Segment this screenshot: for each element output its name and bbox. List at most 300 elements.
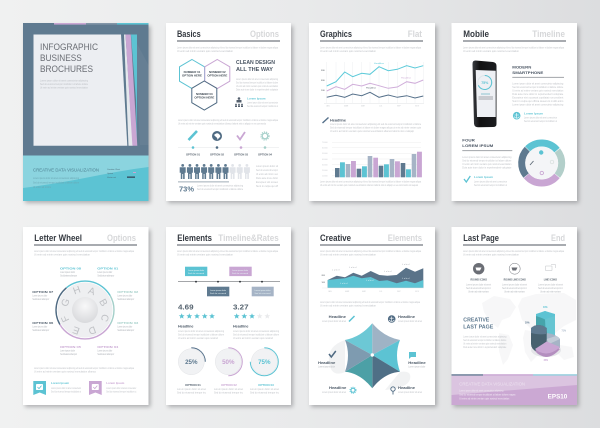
line chart: MAR (344, 104, 349, 108)
line chart: Headline (374, 63, 385, 65)
icon: check (464, 176, 470, 182)
panel: graphics (309, 23, 435, 201)
four lorem ipsum heading: LOREM IPSUM (462, 143, 494, 148)
icon: org chart (235, 97, 243, 107)
clean design heading (236, 60, 275, 73)
item: pin headline (391, 386, 422, 394)
intro text (177, 250, 279, 256)
line chart: Headline (366, 88, 377, 90)
option 04: Sed do eiusmod tempor (97, 353, 115, 356)
intro text: Lorem ipsum dolor sit amet consectetur adipiscing elit sed do eiusmod tempor incididunt ut labore et dolore magna aliqua (463, 250, 565, 253)
bar chart: 40000 (322, 159, 328, 161)
option timeline (178, 146, 279, 156)
area chart: SEP (397, 291, 402, 293)
gauge 50%: 50% (222, 359, 235, 366)
icon column: line icons (538, 264, 564, 294)
gauge text: Lorem ipsum dolor sit amet (177, 388, 206, 391)
smartphone text: Sed do eiusmod tempor incididunt ut labore dolore (512, 86, 564, 89)
rating 3.27: Sed do eiusmod tempor incididunt ut labore dolore (233, 334, 280, 336)
timeline: Sed do eiusmod (210, 293, 226, 295)
icon: anchor (513, 112, 520, 119)
icon column: round icons: Sed do eiusmod tempor inc (466, 287, 492, 290)
footer text: Sed do eiusmod tempor incididunt ut labore dolore magna (459, 394, 516, 396)
icon: pencil (188, 131, 197, 140)
line chart (321, 62, 424, 108)
panel: creative (309, 227, 435, 405)
line chart: JUL (379, 106, 382, 108)
callout: lorem ipsum (247, 96, 278, 108)
rating 3.27: Lorem ipsum dolor sit amet consectetur adipiscing (233, 330, 280, 333)
rating 4.69: Lorem ipsum dolor sit amet consectetur adipiscing (178, 330, 225, 333)
body text (34, 367, 135, 374)
creative last page heading: CREATIVE (463, 318, 490, 324)
3D pie chart: 30% (525, 322, 530, 324)
icon: globe (212, 131, 222, 141)
line chart: JAN (326, 104, 330, 108)
item: anchor headline (388, 315, 422, 323)
item: anchor headline: Lorem ipsum dolor sit amet (398, 320, 422, 323)
cover footer text: Lorem ipsum dolor sit amet consectetur adipiscing (33, 177, 80, 180)
item: pin headline: Headline (398, 386, 415, 390)
intro text: Lorem ipsum dolor sit amet consectetur adipiscing elit sed do eiusmod tempor incididunt ut labore et dolore magna aliqua (320, 250, 422, 253)
modern smartphone heading: SMARTPHONE (512, 70, 544, 75)
cover footer text: Ut enim ad minim (33, 186, 51, 189)
option 07: OPTION 07 (32, 290, 54, 294)
panel: elements timeline and rates (166, 227, 291, 405)
heading: end: End (551, 233, 565, 244)
callout: pink: Lorem Ipsum (106, 381, 125, 385)
icon column: round icons (466, 263, 492, 294)
clean design text: Sed do eiusmod tempor incididunt ut labore dolore (236, 82, 279, 84)
modern smartphone heading (512, 65, 544, 75)
letter wheel: G (60, 297, 73, 308)
rating 3.27: Ut enim ad minim veniam quis nostrud (233, 337, 274, 340)
intro text (177, 46, 279, 53)
letter wheel (55, 280, 115, 340)
icon: pencil (322, 118, 328, 123)
timeline: Sed do eiusmod (232, 273, 248, 275)
timeline: Sed do eiusmod (188, 273, 204, 275)
line chart: Headline (401, 78, 412, 80)
item: pencil headline (322, 315, 354, 323)
option 08 (60, 266, 82, 278)
timeline: Lorem ipsum dolor (210, 290, 226, 292)
icon column: line icons: Ut enim ad minim veniam (540, 290, 561, 294)
gauge 50% (215, 348, 242, 376)
item: gear headline: Lorem ipsum dolor sit amet (322, 391, 346, 394)
cover legend (107, 168, 136, 179)
heading: options: Options (250, 29, 279, 40)
callout: teal: Lorem Ipsum (51, 381, 70, 385)
intro text: Ut enim ad minim veniam quis nostrud exercitation (177, 50, 234, 53)
heading: options: Options (107, 233, 136, 244)
footer text (459, 390, 516, 400)
cover title: BROCHURES (40, 64, 93, 75)
callout: lorem ipsum: Sed do eiusmod tempor incididunt ut (247, 105, 278, 108)
icon column: round line icons: ROUND LINE ICONS (504, 280, 526, 282)
stat text (197, 184, 244, 191)
item: pencil headline: Lorem ipsum dolor sit amet (322, 320, 346, 323)
callout: lorem ipsum: Lorem Ipsum (474, 175, 494, 179)
gauge labels: OPTION 03 (258, 383, 274, 387)
intro text: Ut enim ad minim veniam quis nostrud exercitation (463, 50, 520, 53)
headline text block: Headline (330, 118, 346, 122)
option 03: Sed do eiusmod tempor (117, 329, 135, 332)
cover intro text: Sed do eiusmod tempor incididunt ut labore dolore (40, 83, 89, 86)
four lorem text: Lorem ipsum dolor sit amet consectetur adipiscing (462, 156, 512, 159)
clean design text: Ut enim ad minim veniam quis nostrud exercitation (236, 85, 279, 88)
letter wheel: A (87, 286, 97, 298)
gauge text: Sed do eiusmod tempor inc (177, 392, 207, 394)
intro text: Ut enim ad minim veniam quis nostrud exercitation (463, 254, 520, 256)
cover legend: Option (107, 172, 114, 175)
heading: timeline and rates: Timeline&Rates (218, 233, 279, 244)
smartphone text: Lorem ipsum dolor sit amet consectetur adipiscing (512, 104, 564, 106)
rating 4.69: Sed do eiusmod tempor incididunt ut labore dolore (178, 334, 225, 336)
cover intro text: Lorem ipsum dolor sit amet consectetur adipiscing (40, 80, 89, 82)
item: chat headline (408, 352, 426, 368)
icon: check (237, 132, 245, 140)
area chart: Label (402, 264, 411, 266)
panel: mobile (452, 23, 577, 201)
bar chart: 10000 (322, 176, 328, 178)
letter wheel: E (71, 323, 81, 336)
panel: letter wheel (23, 227, 148, 405)
smartphone text: Duis aute irure dolor in reprehenderit voluptate (512, 93, 564, 96)
stat text: Sed do eiusmod tempor incididunt ut labore dolore (197, 188, 244, 191)
3D pie chart: 33% (543, 307, 548, 309)
option 08: Lorem ipsum dolor (60, 271, 75, 274)
area chart: JAN (328, 290, 332, 293)
creative last page heading (463, 318, 494, 330)
side text: Sunt in culpa qui off (256, 185, 278, 188)
clean design heading: ALL THE WAY (236, 67, 274, 73)
option 07: Lorem ipsum dolor (32, 294, 48, 298)
area chart: 100 (322, 282, 326, 284)
headline text block (330, 118, 422, 133)
panel: basics (166, 23, 291, 201)
creative last page text: Sed do eiusmod tempor incididunt ut labore dolore (463, 339, 507, 342)
area chart: JUL (379, 291, 382, 293)
footer text: Ut enim ad minim veniam quis nostrud exercitation (459, 398, 510, 400)
option 02: Sed do eiusmod tempor (117, 298, 135, 301)
side text: Duis aute irure dolor (256, 177, 278, 180)
heading: flat: Flat (408, 29, 423, 40)
3D pie chart: 71% (562, 330, 566, 332)
area chart: MAR (345, 290, 350, 293)
four lorem ipsum heading: FOUR (462, 138, 475, 143)
icon column: round icons: Lorem ipsum dolor sit amet (466, 284, 491, 286)
rating 4.69: 4.69 (178, 304, 194, 311)
creative last page text: Duis aute irure dolor in reprehenderit voluptate (463, 346, 507, 349)
hexagon diagram: NUMBER 03 (196, 92, 213, 96)
callout: lorem ipsum: Lorem Ipsum (524, 112, 544, 116)
intro text (320, 46, 422, 53)
intro text: Ut enim ad minim veniam quis nostrud exercitation (320, 50, 377, 53)
item: check headline (318, 351, 336, 368)
intro text: Lorem ipsum dolor sit amet consectetur adipiscing elit sed do eiusmod tempor incididunt ut labore et dolore magna aliqua (463, 46, 565, 50)
body text: Ut enim ad minim veniam quis nostrud exercitation (320, 304, 377, 308)
headline text block: Sed do eiusmod tempor incididunt ut labore et dolore magna aliqua ut enim ad minim veniam quis (330, 126, 422, 130)
option 02: OPTION 02 (117, 290, 139, 294)
timeline: Sed do eiusmod (254, 293, 270, 295)
option 07 (32, 290, 54, 301)
intro text (463, 46, 565, 53)
donut chart (522, 143, 562, 183)
heading: creative: Creative (320, 233, 351, 244)
footer text: Lorem ipsum dolor sit amet consectetur adipiscing (459, 390, 504, 392)
gauge text: Lorem ipsum dolor sit amet (214, 388, 243, 391)
area chart: NOV (415, 291, 420, 293)
intro text: Ut enim ad minim veniam quis nostrud exercitation (320, 254, 377, 256)
line chart: NOV (415, 106, 420, 108)
icon column: round line icons (502, 263, 528, 294)
creative last page text: Lorem ipsum dolor sit amet consectetur adipiscing (463, 336, 507, 338)
clean design heading: CLEAN DESIGN (236, 60, 275, 66)
panel: cover brochure (23, 23, 148, 201)
callout: lorem ipsum: Lorem ipsum dolor sit amet consectetur (524, 116, 557, 120)
gauge text (177, 388, 280, 394)
gauge labels: OPTION 02 (221, 383, 237, 387)
intro text: Lorem ipsum dolor sit amet consectetur adipiscing elit sed do eiusmod tempor incididunt ut labore et dolore magna aliqua (177, 250, 279, 253)
creative last page heading: LAST PAGE (463, 324, 494, 330)
option 08: Sed do eiusmod tempor (60, 274, 77, 278)
rating 3.27: 3.27 (233, 304, 249, 311)
headline text block: Ut enim ad minim veniam quis nostrud exercitation ullamco laboris nisi ut aliquip (330, 130, 415, 133)
modern smartphone heading: MODERN (512, 65, 531, 70)
panel: last page (452, 227, 577, 405)
option timeline: OPTION 03 (234, 152, 249, 156)
rating 3.27 (233, 304, 280, 340)
option 07: Sed do eiusmod tempor (32, 298, 50, 301)
item: check headline: Lorem ipsum dolor (318, 366, 335, 368)
option timeline: OPTION 04 (258, 152, 273, 156)
clean design text (236, 78, 279, 92)
body text: Lorem ipsum dolor sit amet consectetur adipiscing elit sed do eiusmod tempor incididunt ut labore et dolore magna aliqua (34, 367, 135, 370)
option 05: Sed do eiusmod tempor (60, 353, 77, 356)
footer band (452, 374, 577, 405)
callout: lorem ipsum: Lorem ipsum dolor sit amet consectetur (247, 102, 278, 104)
heading: basics: Basics (177, 29, 201, 40)
clean design text: Lorem ipsum dolor sit amet consectetur adipiscing (236, 78, 279, 81)
option 04: OPTION 04 (97, 345, 119, 349)
letter wheel: H (72, 285, 82, 297)
callout: lorem ipsum: Lorem ipsum dolor sit amet consectetur (474, 180, 507, 184)
gauge text: Sed do eiusmod tempor inc (214, 392, 244, 394)
option 06: Sed do eiusmod tempor (32, 329, 50, 332)
option 02: Lorem ipsum dolor (117, 294, 133, 298)
cover footer text: Sed do eiusmod tempor incididunt ut labore dolore (33, 182, 80, 184)
option 03 (117, 321, 139, 332)
option 06: Lorem ipsum dolor (32, 326, 48, 328)
intro text: Lorem ipsum dolor sit amet consectetur adipiscing elit sed do eiusmod tempor incididunt ut labore et dolore magna aliqua (34, 250, 135, 253)
intro text: Ut enim ad minim veniam quis nostrud exercitation (177, 254, 234, 256)
area chart: Label (332, 270, 341, 272)
cover footer text (33, 177, 80, 189)
icon column: round icons: ROUND ICONS (471, 280, 487, 282)
side text (256, 165, 279, 188)
four lorem text: Sed do eiusmod tempor incididunt ut labore dolore (462, 160, 512, 162)
umbrella diagram (329, 323, 410, 390)
heading: elements: Elements (388, 233, 422, 244)
item: gear headline (322, 386, 356, 394)
rating 3.27: Headline (233, 324, 248, 328)
item: pin headline: Lorem ipsum dolor sit amet (398, 391, 422, 394)
bar chart (322, 142, 422, 178)
creative last page text (463, 336, 507, 349)
side text: Ut enim ad minim ven (256, 173, 279, 176)
heading: graphics: Graphics (320, 29, 352, 40)
smartphone illustration: 75% (481, 81, 489, 85)
option 05 (60, 345, 82, 356)
icon column: line icons: LINE ICONS (544, 280, 557, 282)
smartphone illustration (472, 60, 496, 127)
letter wheel: B (96, 297, 109, 309)
item: chat headline: Lorem ipsum dolor (408, 366, 426, 368)
callout: pink (106, 381, 137, 394)
cover intro text (40, 80, 89, 90)
callout: lorem ipsum: Lorem Ipsum (247, 96, 266, 100)
body text: Ut enim ad minim veniam quis nostrud exercitation ullamco laboris nisi ut aliquip ex ea commodo (178, 122, 267, 126)
icon column: round icons: Ut enim ad minim veniam (468, 290, 489, 294)
gauge text: Sed do eiusmod tempor inc (250, 392, 280, 394)
hexagon diagram: OPTION HERE (182, 74, 202, 78)
option 04: Lorem ipsum dolor (97, 350, 113, 352)
footer title: CREATIVE DATA VISUALIZATION (459, 382, 525, 386)
intro text: Ut enim ad minim veniam quis nostrud exercitation (34, 254, 91, 256)
smartphone text (512, 82, 564, 106)
option 04 (97, 345, 119, 356)
option 01 (97, 266, 119, 278)
timeline (178, 267, 280, 296)
option 02 (117, 290, 139, 301)
area chart: MAY (362, 290, 367, 293)
badge: teal check (33, 381, 46, 395)
four lorem text: Ut enim ad minim veniam quis nostrud exercitation (462, 163, 512, 166)
four lorem ipsum heading (462, 138, 494, 148)
3D pie chart: 45% (544, 359, 548, 362)
icon column: line icons: Lorem ipsum dolor sit amet (538, 284, 563, 286)
area chart: 200 (322, 275, 326, 277)
intro text (463, 250, 565, 256)
option 06 (32, 321, 54, 332)
rating 4.69: Headline (178, 324, 194, 328)
cover title: BUSINESS (40, 53, 82, 64)
gauge 75% (250, 348, 278, 376)
area chart: Label (366, 280, 375, 282)
icon column: round line icons: Ut enim ad minim veniam (504, 290, 525, 294)
item: gear headline: Headline (329, 386, 346, 390)
option 08: OPTION 08 (60, 266, 82, 270)
bar chart: 70000 (322, 142, 328, 144)
line chart: MAY (361, 104, 366, 108)
rating 4.69: Ut enim ad minim veniam quis nostrud (178, 337, 219, 340)
timeline: Lorem ipsum dolor (232, 270, 248, 272)
icon: gear (261, 132, 269, 140)
item: chat headline: Headline (408, 361, 426, 365)
body text: Lorem ipsum dolor sit amet consectetur adipiscing elit sed do eiusmod tempor incididunt ut labore et dolore magna aliqua (178, 119, 279, 122)
hexagon diagram: OPTION HERE (207, 74, 227, 78)
bar chart: 20000 (322, 170, 328, 172)
letter wheel: C (98, 312, 110, 323)
footer text: Lorem ipsum dolor sit amet consectetur adipiscing elit sed do eiusmod tempor incididunt ut labore et dolore magna aliqua (320, 180, 422, 184)
stat text: Lorem ipsum dolor sit amet consectetur adipiscing (197, 184, 244, 188)
body text: Lorem ipsum dolor sit amet consectetur adipiscing elit sed do eiusmod tempor incididunt ut labore et dolore magna aliqua (320, 301, 421, 304)
heading: timeline: Timeline (532, 29, 565, 40)
letter wheel: F (60, 313, 72, 324)
cover title (40, 42, 98, 75)
option 03: OPTION 03 (117, 321, 139, 325)
hexagon diagram: NUMBER 01 (184, 70, 201, 74)
footer text: Ut enim ad minim veniam quis nostrud exercitation ullamco laboris nisi ut aliquip ex ea commodo consequat (320, 184, 418, 187)
option 06: OPTION 06 (32, 321, 54, 325)
four lorem text: Duis aute irure dolor in reprehenderit voluptate (462, 166, 512, 170)
heading: last page: Last Page (463, 233, 499, 244)
hexagon diagram: NUMBER 02 (209, 70, 226, 74)
cover subtitle: CREATIVE DATA VISUALIZATION (33, 168, 99, 172)
badge: pink check (89, 381, 102, 395)
gauge 75%: 75% (258, 359, 271, 366)
headline text block: Lorem ipsum dolor sit amet consectetur adipiscing elit sed do eiusmod tempor incididunt ut labore (330, 123, 422, 126)
area chart: Label (384, 271, 393, 273)
hexagon diagram (180, 60, 230, 110)
option 01: OPTION 01 (97, 266, 119, 270)
item: pencil headline: Headline (329, 315, 346, 319)
callout: lorem ipsum (524, 112, 557, 123)
people pictogram (178, 164, 250, 182)
area chart: Label (349, 267, 358, 269)
icon column: line icons: Sed do eiusmod tempor inc (538, 287, 564, 290)
smartphone text: Excepteur sint occaecat cupidatat non proident (512, 96, 564, 100)
body text (178, 119, 279, 126)
gauge 25%: 25% (185, 359, 198, 366)
gauge text: Lorem ipsum dolor sit amet (250, 388, 279, 391)
cover legend: Vector set (107, 176, 116, 179)
intro text: Lorem ipsum dolor sit amet consectetur adipiscing elit sed do eiusmod tempor incididunt ut labore et dolore magna aliqua (177, 46, 279, 50)
icon column: round line icons: Sed do eiusmod tempor inc (502, 287, 528, 290)
intro text (320, 250, 422, 256)
icon column: round line icons: Lorem ipsum dolor sit amet (502, 284, 527, 286)
callout: pink: Lorem ipsum dolor sit amet consectetur (106, 387, 136, 390)
side text: Excepteur sint occaec (256, 181, 279, 184)
EPS10 label: EPS10 (548, 394, 568, 400)
bar chart: 60000 (322, 148, 328, 150)
footer text (320, 180, 422, 187)
side text: Lorem ipsum dolor sit (256, 165, 278, 168)
world map background (482, 293, 576, 365)
bar chart: 30000 (322, 164, 328, 166)
intro text (34, 250, 135, 256)
option 05: Lorem ipsum dolor (60, 350, 75, 352)
callout: teal (51, 381, 81, 394)
creative last page text: Ut enim ad minim veniam quis nostrud exercitation (463, 342, 507, 346)
gauge labels (185, 383, 274, 387)
callout: teal: Lorem ipsum dolor sit amet consectetur (51, 387, 81, 390)
line chart: SEP (397, 106, 402, 108)
option timeline: OPTION 01 (186, 152, 201, 156)
item: anchor headline: Headline (398, 315, 415, 319)
smartphone text: Lorem ipsum dolor sit amet consectetur adipiscing (512, 82, 564, 86)
heading: mobile: Mobile (463, 29, 489, 40)
area chart (322, 264, 424, 293)
bar chart: 50000 (322, 153, 328, 155)
3D pie chart (525, 307, 566, 362)
heading: letter wheel: Letter Wheel (34, 233, 82, 244)
area chart: Label (402, 278, 411, 280)
four lorem text (462, 156, 512, 170)
letter wheel: D (87, 323, 97, 336)
option 01: Lorem ipsum dolor (97, 271, 113, 274)
